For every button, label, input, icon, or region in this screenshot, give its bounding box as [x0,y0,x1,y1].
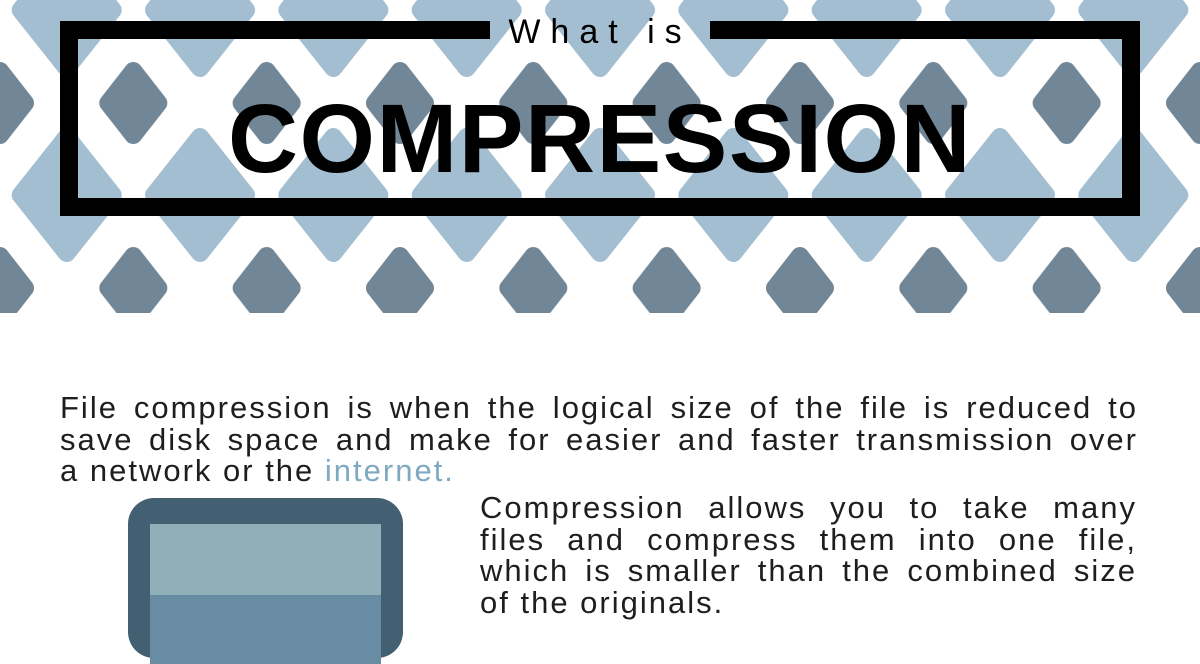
text block: definition: a network or the internet. [60,453,455,488]
title frame [60,21,1140,216]
header pattern background [0,0,1200,313]
text block: compression many files: files and compress them into one file, [480,522,1137,556]
text block: definition: File compression is when the logical size of the file is reduced to [60,390,1138,425]
text block: compression many files: of the originals. [480,584,724,620]
icon: tablet [128,498,403,658]
text block: compression many files [480,490,1137,620]
tablet screen [150,524,381,664]
title: COMPRESSION: COMPRESSION [228,84,972,193]
text block: definition [60,390,1138,488]
text block: compression many files: which is smaller than the combined size [480,553,1137,588]
subtitle: What is: What is [508,13,692,51]
text block: definition: save disk space and make for easier and faster transmission over [60,422,1138,456]
text block: compression many files: Compression allows you to take many [480,490,1137,525]
